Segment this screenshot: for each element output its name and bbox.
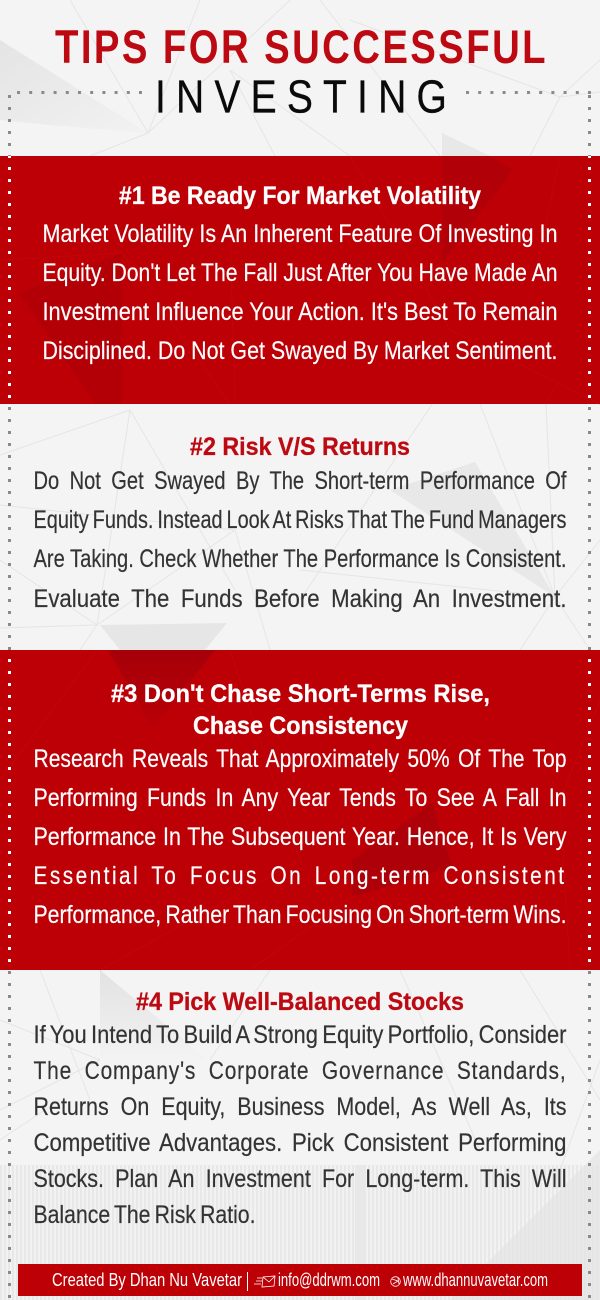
footer credit: Created By Dhan Nu Vavetar (52, 1270, 242, 1290)
title line 2: INVESTING (155, 70, 457, 122)
text: tip 4 body (34, 1021, 566, 1229)
heading: tip 2: #2 Risk V/S Returns (190, 433, 410, 461)
icon: mail (254, 1276, 275, 1287)
heading: tip 3: Chase Consistency (193, 712, 408, 740)
heading: tip 3: #3 Don't Chase Short-Terms Rise, (111, 680, 490, 708)
text: tip 4 body: Balance The Risk Ratio. (34, 1201, 256, 1229)
panel: tip 1 band (0, 156, 600, 404)
footer email: info@ddrwm.com (278, 1270, 380, 1290)
title (55, 21, 548, 122)
footer bar (18, 1264, 582, 1296)
heading: tip 1: #1 Be Ready For Market Volatility (119, 182, 481, 210)
footer website: www.dhannuvavetar.com (402, 1270, 548, 1290)
footer divider (247, 1272, 248, 1291)
heading: tip 4: #4 Pick Well-Balanced Stocks (136, 988, 464, 1016)
text: tip 3 body (34, 745, 567, 929)
text: tip 1 body (42, 220, 558, 365)
text: tip 2 body (34, 467, 567, 613)
icon: globe (391, 1277, 400, 1286)
panel: tip 3 band (0, 650, 600, 970)
heading: tip 3 (111, 680, 490, 740)
